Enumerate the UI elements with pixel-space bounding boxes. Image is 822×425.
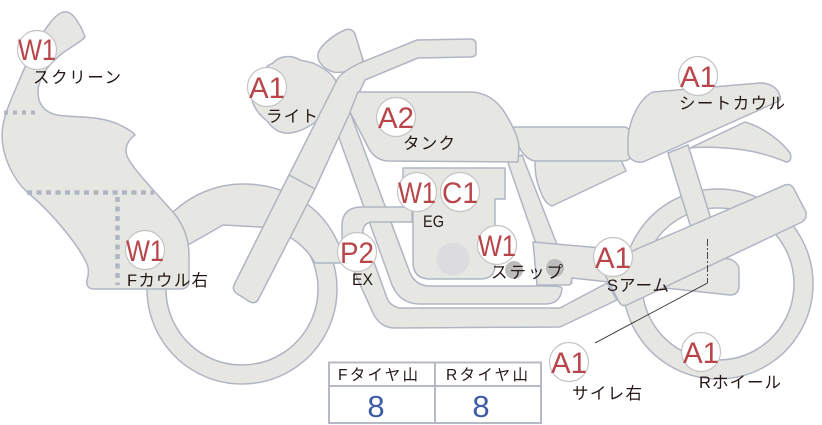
pivot plate (533, 242, 739, 295)
exhaust pipe (342, 207, 617, 328)
main frame (338, 112, 562, 304)
swing arm (600, 184, 806, 306)
leader line: サイレ右 (595, 239, 708, 343)
badge A1 light: A1 (249, 72, 285, 105)
side cover (535, 160, 626, 206)
value F tire: 8 (367, 389, 385, 424)
fork outer tube (233, 175, 315, 303)
badge A2 tank: A2 (378, 102, 414, 135)
footpeg shadows (505, 259, 564, 279)
label step: ステップ (491, 263, 564, 282)
badge W1 screen: W1 (18, 34, 56, 67)
cowl panel lines (4, 112, 154, 285)
engine cover circle (436, 242, 470, 276)
headlight (252, 57, 338, 133)
tank (350, 92, 519, 162)
label screen: スクリーン (33, 68, 121, 87)
label EX: EX (352, 271, 373, 289)
seat (510, 127, 630, 161)
badge W1 step: W1 (478, 230, 516, 263)
seat cowl (628, 83, 780, 162)
tire tread table (329, 362, 541, 424)
engine (403, 168, 505, 279)
label front cowl: Fカウル右 (127, 271, 208, 290)
rear shock (668, 145, 711, 228)
rear frame tube (507, 155, 572, 284)
label swing arm: Sアーム (607, 277, 669, 295)
label light: ライト (266, 108, 318, 126)
badge W1 engine: W1 (398, 177, 436, 210)
front cowl (2, 12, 189, 289)
badge W1 front cowl: W1 (126, 235, 164, 268)
badge A1 swing arm: A1 (595, 242, 631, 275)
label EG: EG (423, 213, 444, 231)
label rear wheel: Rホイール (699, 374, 781, 392)
badge A1 silencer: A1 (551, 347, 587, 380)
header F tire: Fタイヤ山 (338, 366, 418, 384)
label silencer: サイレ右 (572, 384, 642, 403)
rear fender (690, 122, 791, 162)
meter (318, 29, 363, 72)
label seat cowl: シートカウル (679, 94, 785, 113)
fork and handlebar (289, 39, 476, 189)
badge A1 seat cowl: A1 (680, 61, 716, 94)
badge A1 rear wheel: A1 (683, 337, 719, 370)
front wheel (147, 194, 337, 384)
badge C1 engine: C1 (442, 177, 478, 210)
front fender (173, 184, 345, 263)
header R tire: Rタイヤ山 (446, 366, 528, 384)
label tank: タンク (403, 134, 455, 153)
rear wheel (623, 189, 813, 379)
badge P2 exhaust: P2 (340, 237, 374, 270)
value R tire: 8 (472, 389, 490, 424)
